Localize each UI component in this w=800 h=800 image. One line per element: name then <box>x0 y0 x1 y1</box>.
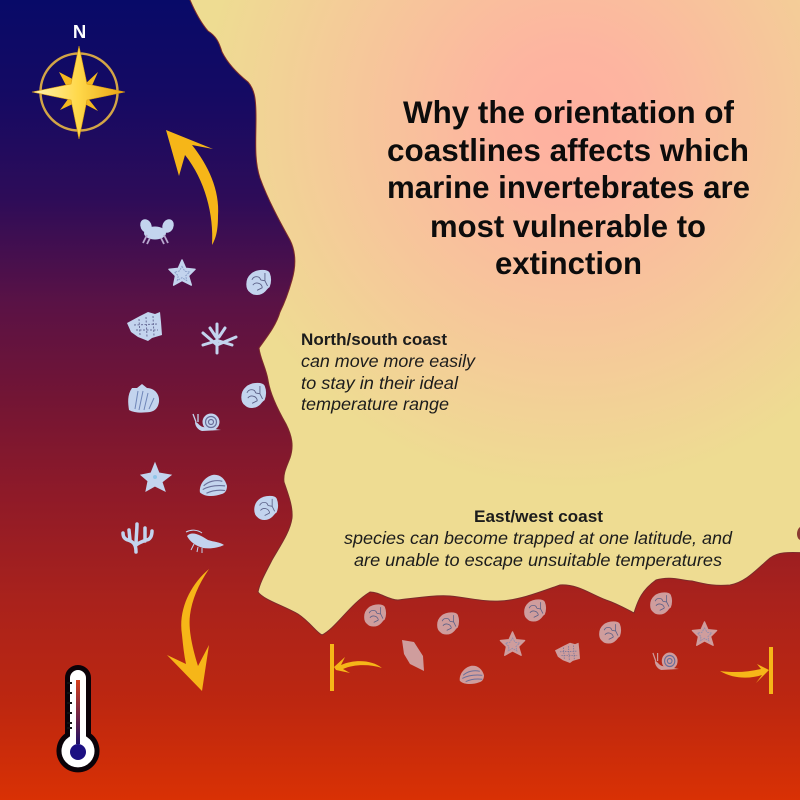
title: extinction <box>495 245 642 281</box>
thermometer bulb <box>70 744 86 760</box>
arrow: east limit <box>720 647 773 694</box>
icon: starfish <box>500 632 525 655</box>
icon: spiky shell <box>555 643 580 663</box>
compass rose <box>32 21 125 139</box>
icon: coral branch <box>203 324 236 353</box>
text block: east/west coast: East/west coast <box>474 508 604 526</box>
compass ring <box>40 54 118 130</box>
icons: north-south coast species <box>123 217 278 553</box>
title: coastlines affects which <box>387 132 749 168</box>
compass main star <box>32 46 125 139</box>
edge fleck of sea at right border <box>797 527 800 540</box>
icon: coral <box>123 524 152 552</box>
icon: ammonite <box>438 613 459 634</box>
icon: snail <box>653 652 679 670</box>
text block: east/west coast: species can become trapped at one latitude, and <box>344 528 733 548</box>
icon: thermometer <box>59 668 97 770</box>
text block: north/south coast: North/south coast <box>301 331 448 349</box>
icon: clam <box>200 475 227 496</box>
text block: north/south coast: can move more easily <box>301 351 476 371</box>
icon: scallop <box>128 384 159 413</box>
icon: starfish <box>692 622 717 645</box>
title: marine invertebrates are <box>387 169 750 205</box>
icon: elongated shell <box>402 640 424 671</box>
arrow: north migration <box>166 130 218 245</box>
icon: starfish <box>169 260 195 285</box>
title <box>387 94 750 281</box>
icon: snail <box>193 414 221 431</box>
thermometer mercury <box>76 680 80 744</box>
land: coastline <box>186 0 800 635</box>
icon: ammonite <box>365 605 386 626</box>
icon: clam <box>460 666 484 684</box>
icon: shrimp <box>186 530 224 553</box>
icon: spiky shell <box>127 312 162 341</box>
arrow: south migration <box>167 569 209 691</box>
text block: north/south coast: to stay in their ideal <box>301 373 459 393</box>
text block: north/south coast <box>301 331 476 414</box>
title: Why the orientation of <box>403 94 734 130</box>
icons: east-west coast species <box>365 593 717 684</box>
text block: east/west coast: are unable to escape unsuitable temperatures <box>354 550 722 570</box>
title: most vulnerable to <box>430 208 706 244</box>
icon: ammonite <box>651 593 672 614</box>
text block: north/south coast: temperature range <box>301 394 449 414</box>
icon: crab <box>138 217 176 244</box>
compass diagonal points <box>59 72 98 111</box>
icon: ammonite <box>247 270 271 295</box>
icon: starfish <box>141 463 171 491</box>
compass north label: N <box>73 21 86 42</box>
icon: ammonite <box>600 622 621 643</box>
icon: ammonite <box>255 496 278 520</box>
icon: ammonite <box>525 600 546 621</box>
thermometer outline <box>59 668 97 770</box>
arrow: west limit <box>330 644 382 691</box>
thermometer ticks <box>67 683 72 728</box>
icon: ammonite <box>242 383 266 408</box>
text block: east/west coast <box>344 508 733 570</box>
